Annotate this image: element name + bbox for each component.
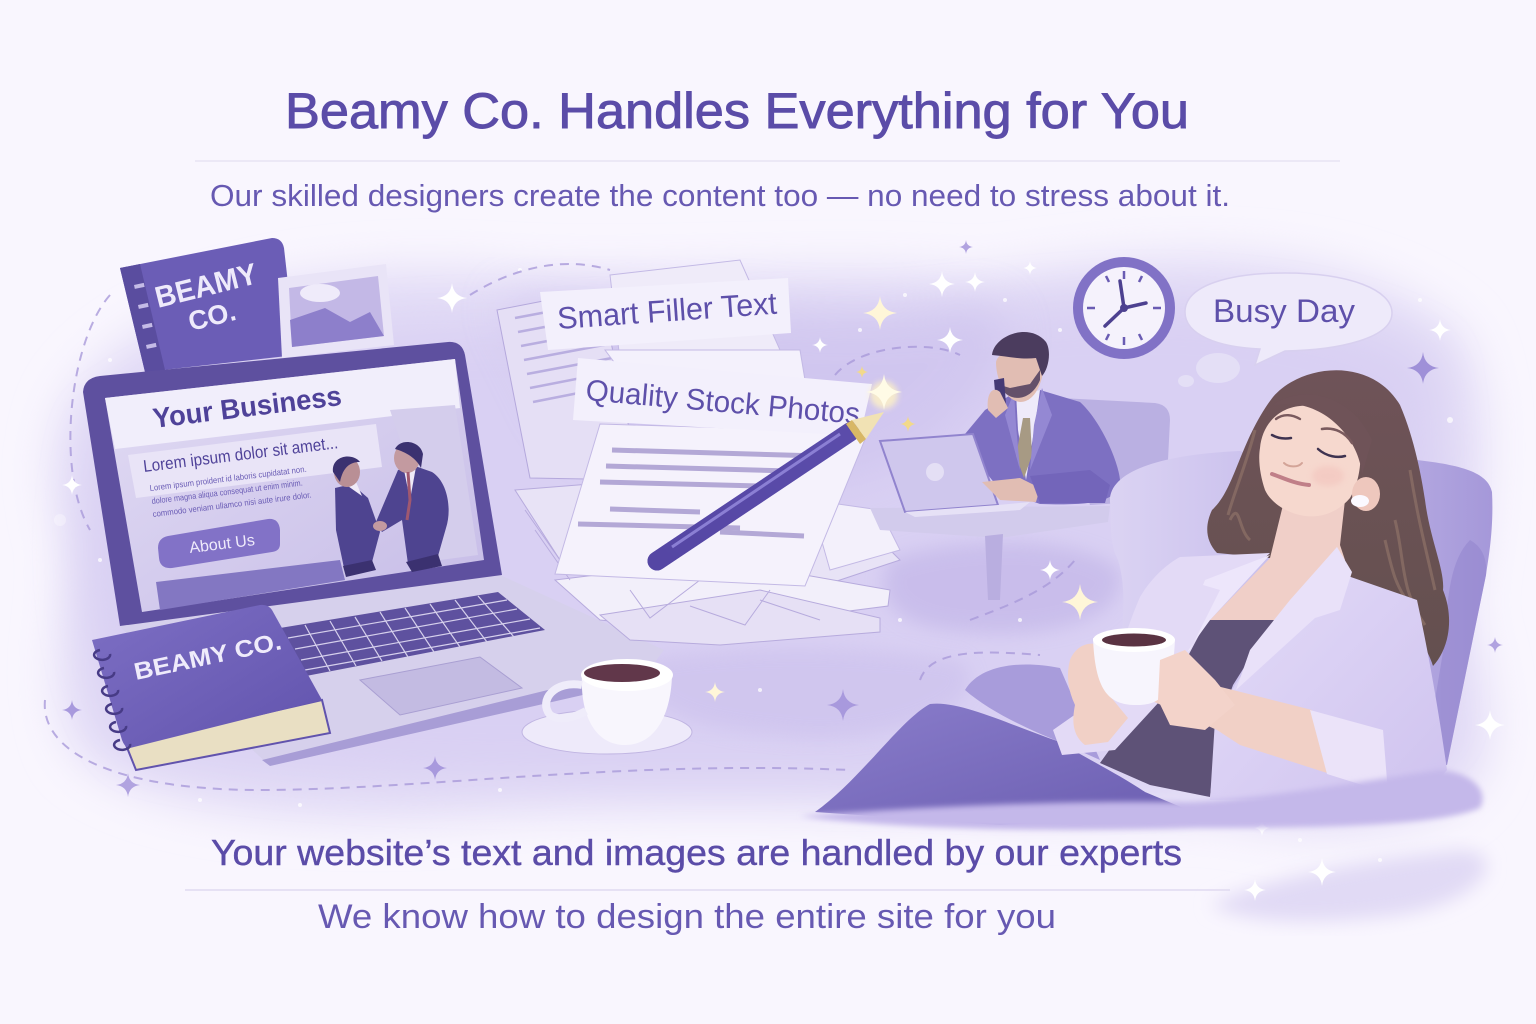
keyboard	[280, 592, 545, 676]
label: quality stock photos	[573, 358, 872, 436]
front book: BEAMY CO.	[132, 628, 284, 686]
lower mist over the scene	[800, 770, 1483, 830]
laptop screen	[105, 359, 484, 612]
pen	[657, 366, 916, 561]
woman relaxing	[815, 370, 1492, 825]
clock	[1073, 257, 1175, 359]
coffee cup	[1093, 628, 1175, 705]
title: Beamy Co. Handles Everything for You	[285, 83, 1189, 139]
forearm	[1150, 672, 1327, 773]
laptop	[83, 342, 664, 766]
back notebook: CO.	[185, 296, 239, 337]
trackpad	[360, 657, 522, 715]
blazer cuff	[1310, 710, 1388, 793]
blouse	[1100, 620, 1274, 797]
left businessman	[335, 484, 380, 568]
blazer body	[1210, 547, 1447, 800]
blazer left sleeve	[1053, 553, 1270, 755]
blazer lapels	[1236, 547, 1352, 690]
front book	[92, 605, 330, 770]
man's hand	[982, 478, 1040, 502]
desk-side coffee	[522, 659, 692, 754]
man's suit	[960, 390, 1120, 504]
speckle dots	[54, 268, 1472, 862]
website copy: Lorem ipsum dolor sit amet...	[142, 433, 339, 476]
bottom sub-caption: We know how to design the entire site for you	[318, 898, 1056, 936]
website copy	[128, 424, 382, 519]
bottom caption: Your website’s text and images are handled by our experts	[211, 832, 1182, 873]
desk	[870, 506, 1110, 600]
label: quality stock photos: Quality Stock Photos	[584, 374, 861, 431]
cheek blush	[1312, 466, 1344, 486]
hair strands	[1228, 430, 1435, 625]
website header	[105, 359, 460, 449]
speech bubble: busy day: Busy Day	[1213, 293, 1355, 329]
handshake people	[333, 442, 449, 577]
website copy: dolore magna aliqua consequat ut enim minim.	[151, 478, 303, 506]
man at desk	[870, 332, 1170, 600]
neck and chest	[1208, 500, 1345, 622]
website header: Your Business	[151, 380, 343, 434]
label: smart filler text: Smart Filler Text	[556, 286, 778, 336]
background wash	[54, 257, 1489, 922]
back notebook	[120, 238, 296, 372]
website copy: commodo veniam ullamco nisi aute irure dolor.	[152, 490, 312, 519]
man's head	[996, 350, 1044, 402]
photo card	[278, 264, 394, 358]
hair top front	[1273, 395, 1372, 475]
about us button	[158, 519, 280, 568]
face	[1259, 406, 1361, 516]
office backdrop	[390, 405, 478, 560]
upper leg	[965, 664, 1100, 760]
clasped hands	[373, 521, 387, 531]
website copy: Lorem ipsum proident id laboris cupidatat non.	[149, 464, 307, 493]
paper stack	[497, 260, 900, 645]
ear and earbud	[1351, 477, 1380, 511]
blazer	[1053, 547, 1447, 800]
laptop base	[118, 575, 664, 766]
small laptop	[880, 434, 998, 512]
phone and hand	[994, 378, 1006, 404]
dashed flow lines	[45, 264, 1075, 790]
subtitle: Our skilled designers create the content too — no need to stress about it.	[210, 178, 1230, 213]
right businessman	[376, 466, 449, 564]
eyebrows, eyes, nose, mouth	[1272, 415, 1352, 485]
office chair	[1060, 398, 1170, 505]
speech bubble: busy day	[1178, 273, 1392, 387]
hand on cup	[1158, 650, 1235, 730]
armchair	[1110, 451, 1492, 790]
main document	[555, 424, 868, 586]
back notebook: BEAMY	[152, 258, 261, 315]
left forearm and hand	[1068, 644, 1128, 745]
sparkles	[62, 240, 1505, 901]
about us button: About Us	[188, 532, 256, 557]
legs	[815, 704, 1200, 825]
hair back	[1207, 370, 1449, 666]
laptop lid	[83, 342, 502, 626]
label: smart filler text	[540, 278, 791, 350]
